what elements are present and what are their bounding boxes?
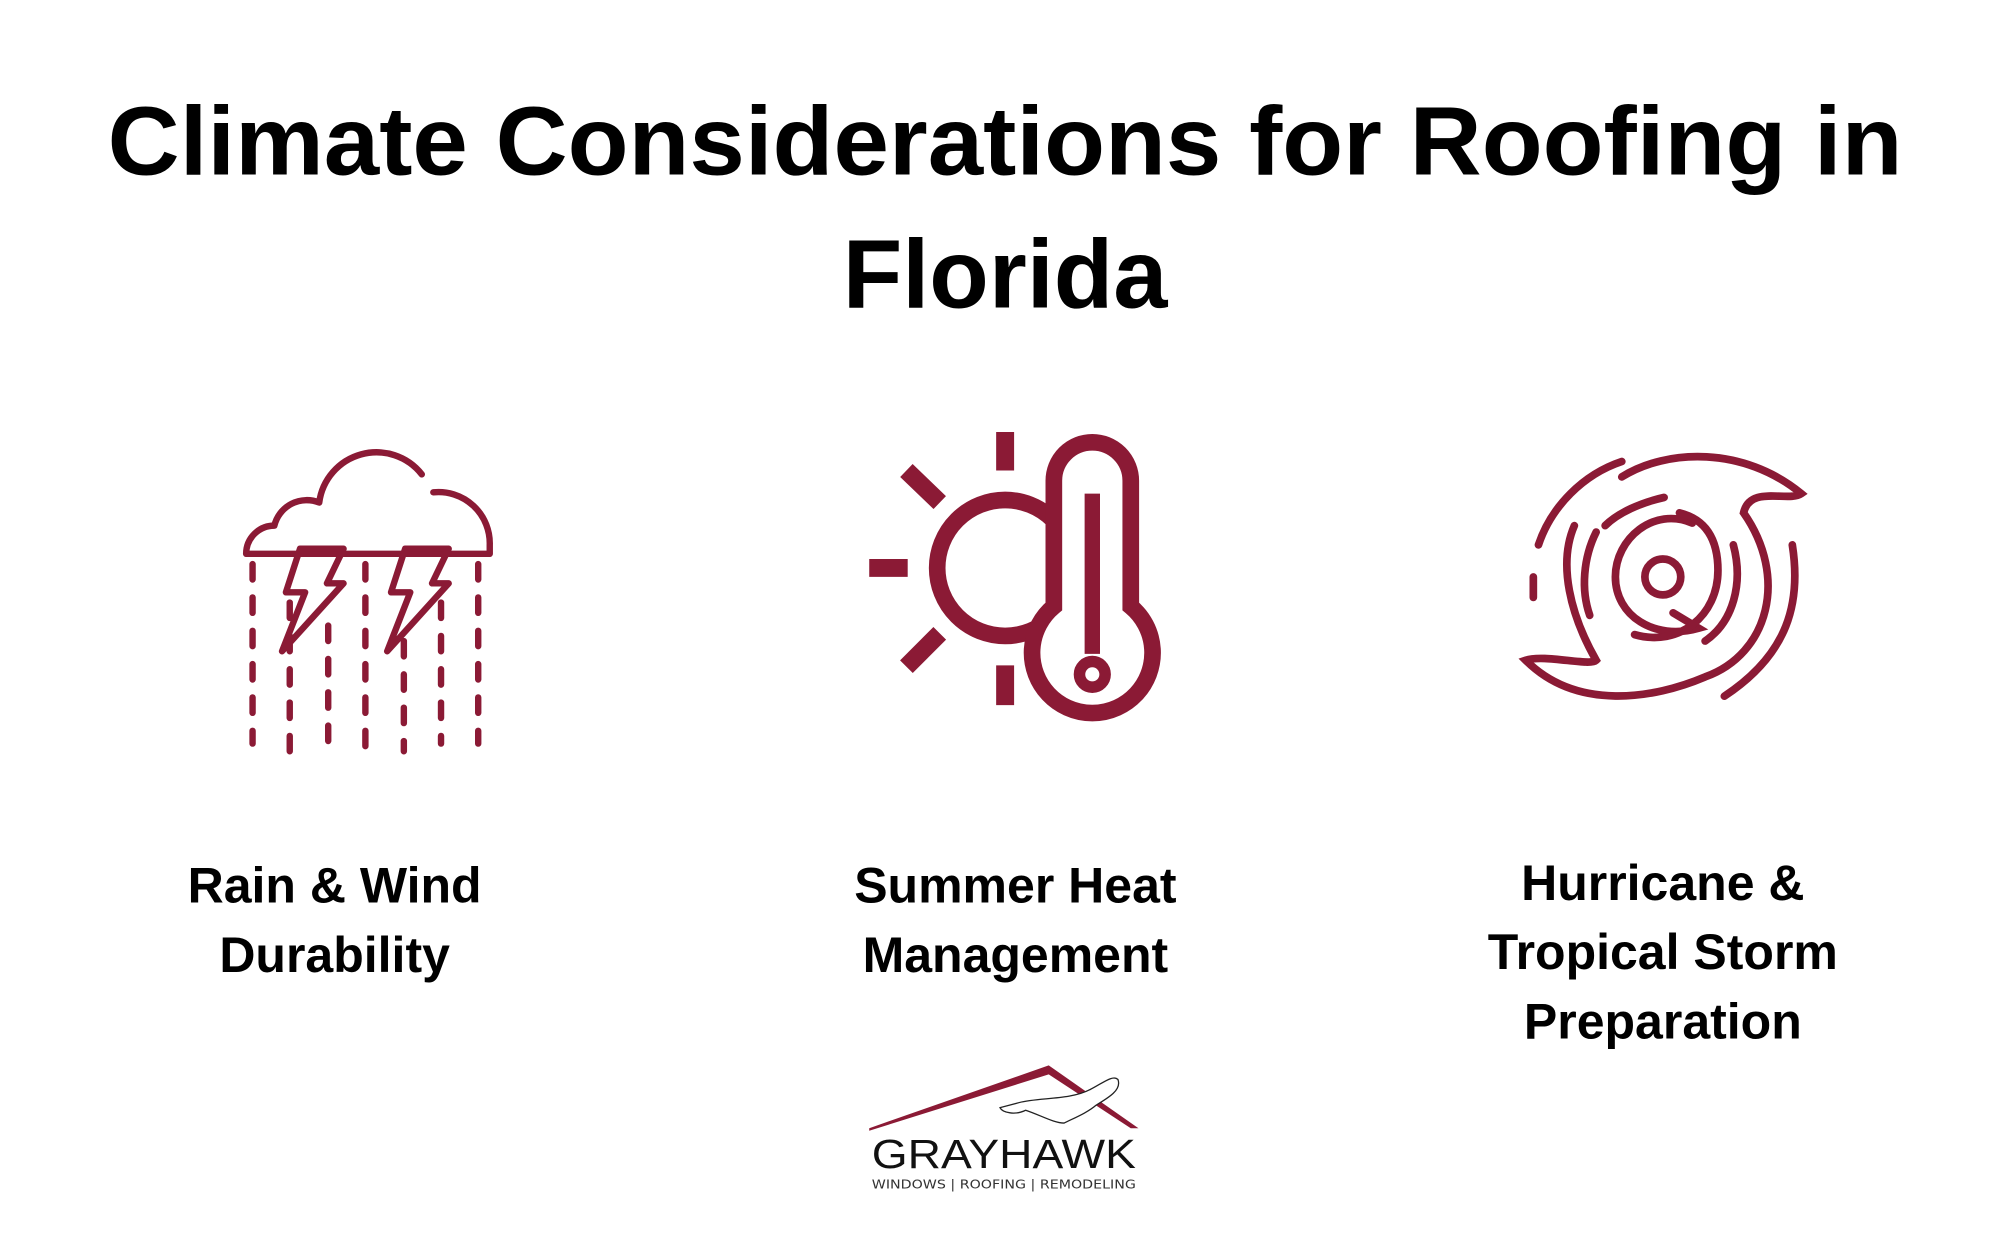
label: summer heat: Management: [863, 927, 1169, 983]
logo: [869, 1065, 1138, 1192]
label: hurricane: [1488, 855, 1838, 1049]
logo: WINDOWS | ROOFING | REMODELING: [872, 1177, 1136, 1192]
label: summer heat: Summer Heat: [854, 858, 1177, 914]
label: hurricane: Tropical Storm: [1488, 924, 1838, 980]
label: rain & wind: Rain & Wind: [188, 858, 482, 914]
title: [108, 86, 1903, 329]
label: rain & wind: [188, 858, 482, 983]
logo: GRAYHAWK: [872, 1131, 1136, 1177]
icon: rain and lightning cloud: [246, 452, 490, 754]
label: hurricane: Preparation: [1524, 993, 1802, 1049]
icon: sun and thermometer: [869, 432, 1153, 713]
title: Climate Considerations for Roofing in: [108, 86, 1903, 195]
label: rain & wind: Durability: [219, 927, 450, 983]
label: summer heat: [854, 858, 1177, 983]
icon: hurricane: [1526, 457, 1801, 696]
title: Florida: [843, 220, 1168, 329]
label: hurricane: Hurricane &: [1521, 855, 1805, 911]
